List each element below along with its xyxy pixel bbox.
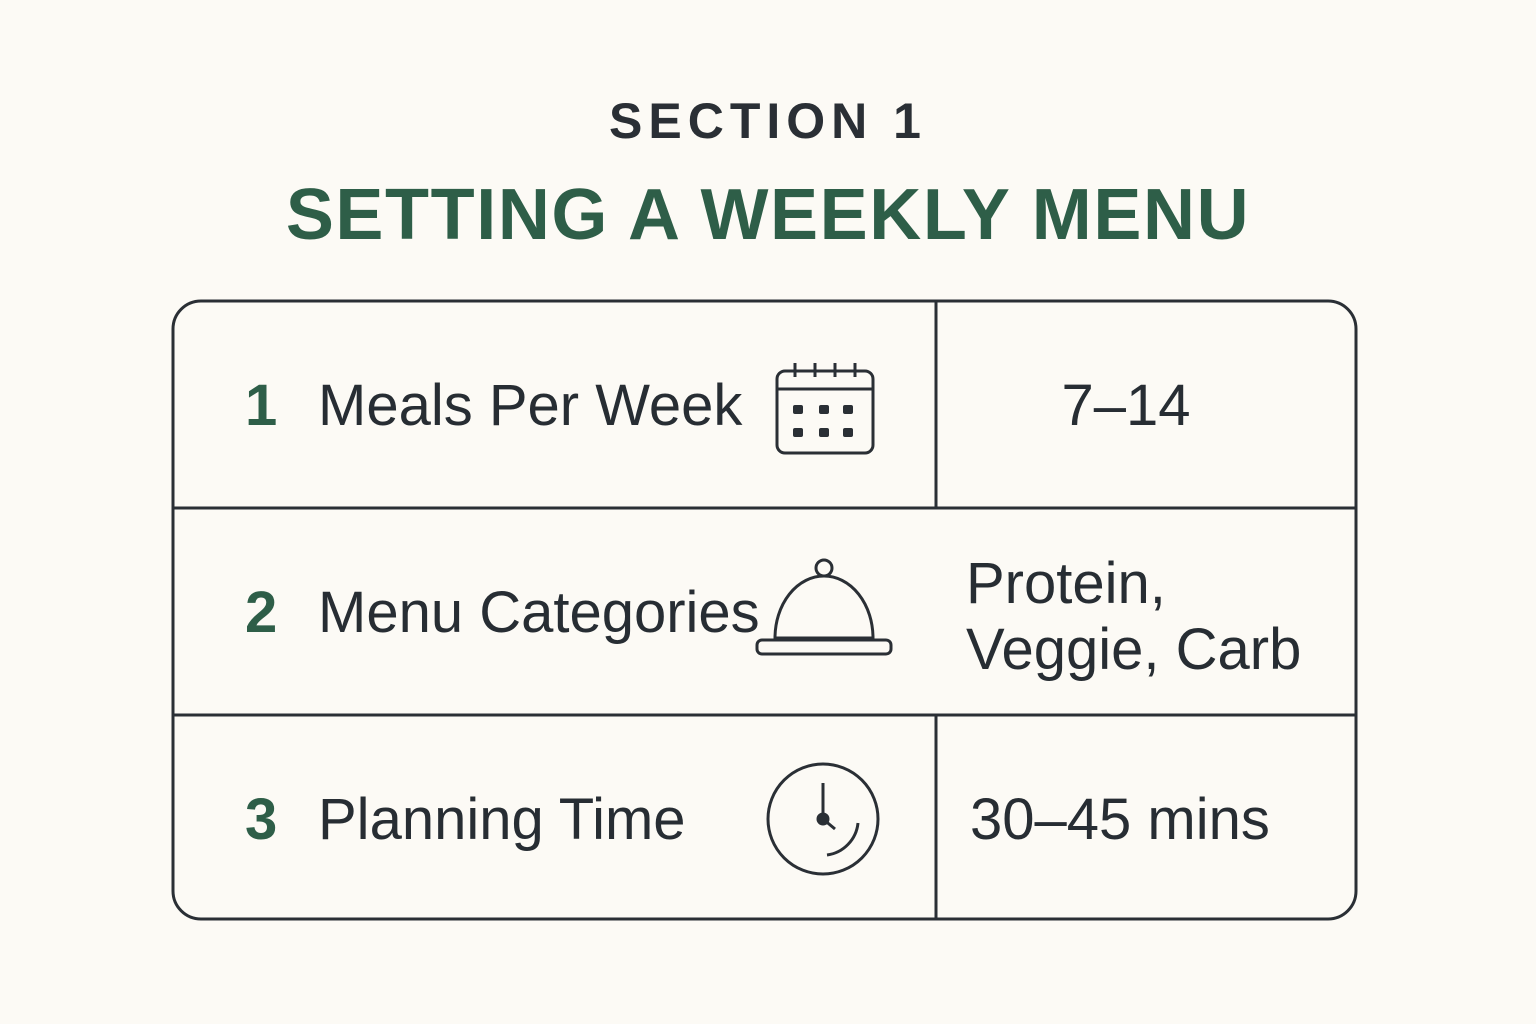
row 2: menu categories: 2 (245, 580, 277, 645)
row 1: meals per week (245, 363, 1191, 454)
row 3: planning time (245, 762, 1270, 876)
row 3: planning time: 3 (245, 787, 277, 852)
row 2: menu categories (245, 551, 1301, 682)
value: 7-14: 7–14 (1061, 373, 1191, 438)
value: time: 30–45 mins (970, 787, 1270, 852)
value: categories: Protein, (966, 551, 1166, 616)
row 1: meals per week: 1 (245, 373, 277, 438)
icon: cloche (756, 558, 892, 656)
row 3: planning time: Planning Time (318, 787, 686, 852)
icon: calendar (776, 363, 874, 454)
row 1: meals per week: Meals Per Week (318, 373, 742, 438)
row 2: menu categories: Menu Categories (318, 580, 760, 645)
value: categories (966, 551, 1301, 682)
title: SETTING A WEEKLY MENU (286, 175, 1250, 255)
value: categories: Veggie, Carb (966, 617, 1301, 682)
section label: SECTION 1 (609, 93, 927, 149)
icon: clock (766, 762, 880, 876)
